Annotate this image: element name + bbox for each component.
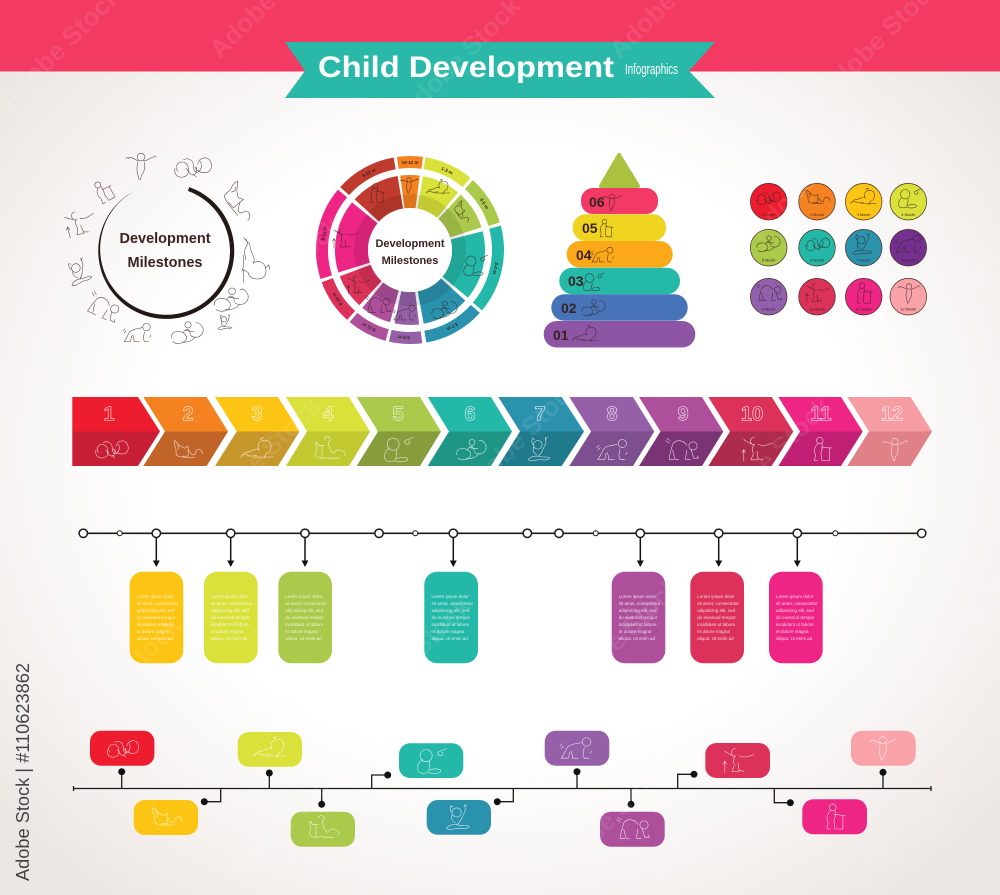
stock watermark pattern: Adobe Stock bbox=[53, 610, 187, 744]
text box 3: adipisicing elit, sed bbox=[285, 608, 324, 613]
circle: month 3 bbox=[845, 183, 882, 220]
main axis with end ticks bbox=[74, 786, 931, 791]
arrow 4: 4 bbox=[322, 404, 334, 426]
donut heading bbox=[375, 238, 445, 267]
ring heading: Development bbox=[119, 231, 211, 247]
text box 7: aliqua. Ut enim ad bbox=[776, 636, 813, 641]
text box 1 bbox=[130, 572, 183, 663]
text box 4: Lorem ipsum dolor bbox=[432, 594, 469, 599]
title ribbon bbox=[285, 42, 715, 98]
stock watermark pattern: Adobe Stock bbox=[503, 120, 637, 254]
ring age labels: 9-12 m bbox=[361, 167, 377, 178]
stock watermark pattern: Adobe Stock bbox=[453, 370, 587, 504]
ring age labels: 10-12 m bbox=[401, 160, 419, 165]
arrow 8: 8 bbox=[606, 404, 618, 426]
tag 6 bbox=[427, 788, 513, 835]
stock watermark pattern: Adobe Stock bbox=[543, 750, 677, 884]
text box 1: et dolore magna bbox=[137, 629, 170, 634]
text box 2: do eiusmod tempor bbox=[211, 615, 250, 620]
tag 10 bbox=[774, 788, 867, 834]
circle: month 4: 4 Month bbox=[901, 213, 915, 217]
circle: month 11 bbox=[845, 278, 882, 315]
text box 6: do eiusmod tempor bbox=[697, 615, 736, 620]
text box 4: aliqua. Ut enim ad bbox=[432, 636, 468, 641]
circle: month 6 bbox=[799, 229, 835, 266]
text box 2: sit amet, consectetur bbox=[211, 601, 253, 606]
text box 1: incididunt ut labore bbox=[137, 622, 175, 627]
circle: month 10 bbox=[799, 278, 835, 315]
circle: month 2: 2 Month bbox=[810, 213, 824, 217]
tag 9 bbox=[678, 743, 770, 788]
text box 7: et dolore magna bbox=[776, 629, 809, 634]
circle: month 7 bbox=[845, 229, 882, 266]
circle: month 1: 1 Month bbox=[762, 213, 776, 217]
arrow 9: 9 bbox=[677, 404, 689, 426]
stock watermark pattern: Adobe Stock bbox=[703, 390, 837, 524]
arrow: node to box 7 bbox=[794, 538, 801, 567]
ring heading: Milestones bbox=[128, 255, 202, 271]
pyramid layer 06 bbox=[581, 188, 658, 214]
arrow: node to box 1 bbox=[153, 538, 160, 567]
subtitle text: Infographics bbox=[625, 61, 678, 78]
arrow 11 bbox=[778, 397, 863, 466]
arrow 9 bbox=[639, 397, 723, 466]
ring age labels: 5-8 m bbox=[398, 334, 410, 340]
text box 2: Lorem ipsum dolor bbox=[211, 594, 249, 599]
header band bbox=[0, 0, 1000, 72]
text box 5: Lorem ipsum dolor bbox=[619, 594, 656, 599]
text box 7 bbox=[769, 572, 823, 663]
text box 4 bbox=[424, 572, 478, 663]
arrow 1: 1 bbox=[103, 404, 115, 426]
text box 1: adipisicing elit, sed bbox=[137, 608, 175, 613]
tag 7 bbox=[545, 731, 609, 788]
stock watermark pattern: Adobe Stock bbox=[213, 210, 347, 344]
outer ring segments bbox=[286, 126, 534, 374]
stock id vertical text: Adobe Stock | #110623862 bbox=[13, 663, 33, 881]
pyramid layer 03: 03 bbox=[568, 273, 584, 289]
pyramid layer 02: 02 bbox=[561, 300, 577, 316]
text box 3: Lorem ipsum dolor bbox=[285, 594, 323, 599]
circle: month 4 bbox=[890, 183, 927, 220]
circle: month 11: 11 Month bbox=[856, 308, 871, 312]
pyramid top triangle bbox=[601, 155, 638, 186]
stock watermark pattern: Adobe Stock bbox=[553, 570, 687, 704]
arrow 6: 6 bbox=[464, 404, 476, 426]
panel: milestones ring with baby line drawings bbox=[62, 153, 270, 343]
arrow 12: 12 bbox=[881, 404, 903, 426]
circle: month 2 bbox=[799, 183, 835, 220]
circle: month 3: 3 Month bbox=[857, 213, 871, 217]
panel: month circles grid bbox=[750, 183, 927, 315]
text box 4: et dolore magna bbox=[432, 629, 465, 634]
panel: horizontal timeline with baby tags bbox=[74, 731, 931, 847]
donut baby icons bbox=[332, 178, 488, 320]
text box 2: et dolore magna bbox=[211, 629, 244, 634]
pyramid layer 02 bbox=[551, 294, 688, 321]
arrow: node to box 5 bbox=[637, 538, 644, 567]
text box 5: sit amet, consectetur bbox=[619, 601, 661, 606]
pyramid layer 01 bbox=[544, 321, 695, 348]
text box 4: sit amet, consectetur bbox=[432, 601, 474, 606]
donut heading: Milestones bbox=[382, 255, 438, 267]
arrow 8 bbox=[569, 397, 654, 466]
baby icons around the ring bbox=[62, 153, 270, 343]
circle: month 6: 6 Month bbox=[810, 258, 824, 262]
text box 5: adipisicing elit, sed bbox=[619, 608, 657, 613]
pyramid layer 06: 06 bbox=[589, 194, 605, 210]
circle: month 12 bbox=[890, 278, 927, 315]
ring age labels bbox=[320, 160, 499, 340]
text box 3: do eiusmod tempor bbox=[285, 615, 324, 620]
tag 3 bbox=[238, 732, 302, 788]
circle: month 8: 8 Month bbox=[901, 258, 915, 262]
circle: month 1 bbox=[750, 183, 787, 220]
tag 1 bbox=[90, 731, 154, 788]
pyramid layer 03 bbox=[559, 268, 680, 294]
ribbon shape bbox=[285, 42, 715, 98]
arrow 7: 7 bbox=[534, 404, 546, 426]
title text: Child Development bbox=[318, 51, 614, 84]
ring age labels: 1-3 m bbox=[440, 166, 453, 176]
text box 2: aliqua. Ut enim ad bbox=[211, 636, 248, 641]
arrow 3: 3 bbox=[251, 404, 263, 426]
panel: twelve month arrow strip bbox=[72, 397, 932, 466]
stock watermark pattern: Adobe Stock bbox=[853, 750, 987, 884]
panel: stacking ring pyramid bbox=[544, 155, 695, 348]
pyramid layer 01: 01 bbox=[553, 327, 569, 343]
circle: month 10: 10 Month bbox=[809, 308, 825, 312]
circle: month 5 bbox=[750, 229, 787, 266]
text box 7: sit amet, consectetur bbox=[776, 601, 818, 606]
text box 6: adipisicing elit, sed bbox=[697, 608, 736, 613]
text box 6: sit amet, consectetur bbox=[697, 601, 739, 606]
ring age labels: 8-11 m bbox=[361, 322, 376, 333]
ring age labels: 9-12 m bbox=[320, 226, 328, 241]
text box 7: do eiusmod tempor bbox=[776, 615, 815, 620]
tag 2 bbox=[134, 788, 221, 835]
pyramid layer 05: 05 bbox=[582, 220, 598, 236]
ring age labels: 3-5 m bbox=[479, 197, 490, 210]
arrow 5 bbox=[357, 397, 441, 466]
text box 6: et dolore magna bbox=[697, 629, 730, 634]
arrow 10 bbox=[708, 397, 793, 466]
text box 7: adipisicing elit, sed bbox=[776, 608, 814, 613]
stock watermark pattern: Adobe Stock bbox=[743, 110, 877, 244]
arrow 4 bbox=[286, 397, 370, 466]
text box 5: et dolore magna bbox=[619, 629, 652, 634]
stock watermark pattern: Adobe Stock bbox=[193, 390, 327, 524]
circle: month 12: 12 Month bbox=[900, 308, 916, 312]
text box 5: aliqua. Ut enim ad bbox=[619, 636, 655, 641]
arrow 10: 10 bbox=[741, 404, 763, 426]
text box 3 bbox=[278, 572, 332, 663]
ring age labels: 8-10 m bbox=[331, 291, 344, 306]
text box 1: Lorem ipsum dolor bbox=[137, 594, 174, 599]
text box 7: Lorem ipsum dolor bbox=[776, 594, 814, 599]
arrow: node to box 4 bbox=[450, 538, 457, 567]
panel: donut chart of milestones bbox=[286, 126, 534, 374]
ring age labels: 3-7 m bbox=[446, 321, 459, 332]
text box 2 bbox=[204, 572, 258, 663]
arrow 5: 5 bbox=[392, 404, 404, 426]
circle: month 9 bbox=[750, 278, 787, 315]
tag 5 bbox=[372, 743, 463, 788]
text box 1: aliqua. Ut enim ad bbox=[137, 636, 173, 641]
text box 3: et dolore magna bbox=[285, 629, 318, 634]
tag 8 bbox=[600, 788, 665, 847]
text box 4: do eiusmod tempor bbox=[432, 615, 471, 620]
donut heading: Development bbox=[375, 238, 445, 250]
pyramid layer 04: 04 bbox=[576, 247, 592, 263]
arrow 7 bbox=[498, 397, 584, 466]
text box 3: sit amet, consectetur bbox=[285, 601, 327, 606]
circle: month 7: 7 Month bbox=[857, 258, 871, 262]
text box 5: do eiusmod tempor bbox=[619, 615, 658, 620]
text box 2: adipisicing elit, sed bbox=[211, 608, 249, 613]
arrow 2 bbox=[143, 397, 228, 466]
ring age labels: 3-4 m bbox=[492, 262, 499, 275]
text box 3: aliqua. Ut enim ad bbox=[285, 636, 322, 641]
pyramid layer 05 bbox=[573, 214, 666, 241]
panel: timeline with text boxes bbox=[79, 529, 926, 663]
circle: month 9: 9 Month bbox=[762, 308, 776, 312]
pyramid layer 04 bbox=[567, 241, 673, 268]
brush circle bbox=[81, 166, 251, 336]
stock watermark pattern: Adobe Stock bbox=[223, 750, 357, 884]
text box 1: sit amet, consectetur bbox=[137, 601, 179, 606]
text box 3: incididunt ut labore bbox=[285, 622, 324, 627]
circle: month 5: 5 Month bbox=[762, 258, 776, 262]
tag 4 bbox=[291, 788, 355, 847]
ring heading bbox=[119, 231, 211, 271]
text box 6: aliqua. Ut enim ad bbox=[697, 636, 734, 641]
arrow 6 bbox=[428, 397, 512, 466]
timeline axis and nodes bbox=[79, 529, 926, 538]
circle: month 8 bbox=[890, 229, 927, 266]
arrow 1 bbox=[72, 397, 160, 466]
tag 11 bbox=[851, 731, 916, 788]
arrow: node to box 6 bbox=[715, 538, 722, 567]
text box 4: adipisicing elit, sed bbox=[432, 608, 470, 613]
wedge radial separators and inner shade bbox=[361, 201, 459, 299]
text box 1: do eiusmod tempor bbox=[137, 615, 176, 620]
text box 7: incididunt ut labore bbox=[776, 622, 814, 627]
inner wedges bbox=[327, 167, 493, 333]
text box 4: incididunt ut labore bbox=[432, 622, 470, 627]
text box 5: incididunt ut labore bbox=[619, 622, 657, 627]
text box 2: incididunt ut labore bbox=[211, 622, 249, 627]
stock watermark pattern: Adobe Stock bbox=[343, 590, 477, 724]
arrow 11: 11 bbox=[810, 404, 832, 426]
arrow: node to box 2 bbox=[227, 538, 234, 567]
text box 6: incididunt ut labore bbox=[697, 622, 736, 627]
arrow 2: 2 bbox=[182, 404, 194, 426]
arrow 12 bbox=[847, 397, 932, 466]
text box 5 bbox=[612, 572, 665, 663]
text box 6 bbox=[690, 572, 744, 663]
stock watermark pattern: Adobe Stock bbox=[3, 250, 137, 384]
arrow 3 bbox=[215, 397, 300, 466]
text box 6: Lorem ipsum dolor bbox=[697, 594, 735, 599]
arrow: node to box 3 bbox=[302, 538, 308, 567]
